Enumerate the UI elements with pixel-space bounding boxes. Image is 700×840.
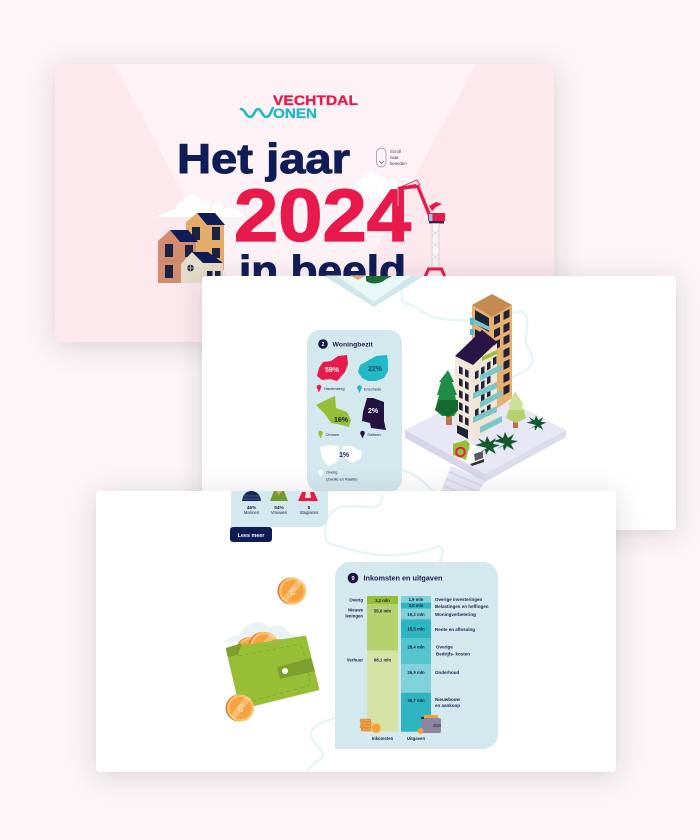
button: Lees meer — [230, 527, 272, 542]
title: Het jaar: Het jaar — [177, 135, 350, 182]
income bar — [345, 596, 398, 732]
panel: staff stats — [231, 491, 328, 527]
icon: small wallet — [418, 715, 441, 734]
expense bar: 1,9 mln — [409, 597, 424, 602]
heading: Inkomsten en uitgaven: 9 — [351, 576, 355, 582]
map: Enschede: 22% — [368, 366, 383, 373]
map: Enschede — [357, 355, 388, 393]
illustration: wallet — [224, 622, 318, 708]
orange tower — [472, 305, 512, 412]
expense bar: Overige — [436, 644, 453, 650]
expense bar: Bedrijfs- kosten — [436, 652, 470, 656]
expense bar: Onderhoud — [435, 670, 459, 675]
expense bar: 3,0 mln — [409, 603, 424, 608]
map: Overig: (Zwolle en Raalte) — [326, 476, 358, 482]
palms — [475, 436, 500, 455]
panel: Woningbezit — [307, 330, 402, 492]
income bar: 55,0 mln — [374, 608, 391, 614]
expense bar: Overige investeringen — [435, 597, 483, 602]
expense bar: Belastingen en heffingen — [435, 604, 489, 609]
cream house — [181, 252, 223, 283]
icon: women — [270, 491, 288, 501]
icon: coin stack — [360, 719, 381, 733]
icon: scroll hint: Scroll — [390, 149, 401, 154]
logo: VECHTDAL — [273, 92, 358, 108]
expense bar: 19,2 mln — [407, 612, 425, 617]
expense bar: Woningverbetering — [435, 612, 476, 617]
map: Dalfsen: 2% — [368, 408, 379, 415]
panel: staff stats: Mannen — [244, 510, 260, 515]
expense bar: 15,5 mln — [407, 626, 425, 632]
panel: Inkomsten en uitgaven: Uitgaven — [407, 736, 425, 741]
map: Enschede: Enschede — [364, 386, 381, 392]
axis labels: Inkomsten — [372, 736, 394, 741]
map: Dalfsen — [360, 398, 386, 438]
title: 2024: 2024 — [234, 174, 411, 257]
heading: Woningbezit: 2 — [322, 342, 325, 348]
panel: staff stats: 5 — [308, 505, 311, 511]
icon: coin at wallet — [226, 694, 254, 722]
income bar: leningen — [345, 614, 363, 618]
illustration: isometric building — [405, 294, 566, 493]
connector path decoration — [402, 287, 532, 500]
panel: staff stats: 46% — [247, 505, 257, 511]
panel: housing card — [202, 276, 676, 530]
balconies — [473, 364, 502, 433]
income bar: 68,1 mln — [374, 658, 391, 662]
panel: cover card — [55, 64, 554, 342]
icon: men — [242, 491, 261, 501]
map: Overig: 1% — [339, 452, 350, 459]
expense bar: 26,9 mln — [407, 670, 425, 675]
panel: staff stats: 54% — [274, 505, 285, 511]
map: Dalfsen: Dalfsen — [368, 432, 381, 437]
panel: staff stats: Vrouwen — [271, 510, 288, 515]
icon: falling coin — [278, 578, 306, 604]
icon: scroll hint — [376, 148, 407, 167]
brown house — [158, 230, 196, 283]
trees — [435, 370, 526, 428]
heading: Woningbezit — [318, 339, 374, 349]
map: Hardenberg: 59% — [325, 367, 340, 374]
panel: staff stats: Stagiaires — [300, 510, 318, 515]
van — [453, 440, 484, 466]
panel: finance card — [96, 491, 616, 772]
title: in beeld: in beeld — [239, 247, 406, 294]
cream tower — [455, 357, 473, 441]
expense bar: 36,7 mln — [407, 698, 425, 703]
income bar: Overig — [349, 598, 363, 602]
heading: Woningbezit: Woningbezit — [332, 342, 374, 348]
map: Overig: Overig — [326, 470, 337, 474]
map: Hardenberg — [317, 355, 348, 392]
icon: clouds — [155, 172, 402, 217]
icon: scroll hint: beneden — [390, 161, 407, 166]
map: Overig — [318, 445, 362, 482]
icon: houses — [158, 213, 225, 283]
platform — [405, 389, 566, 474]
funnel top — [324, 276, 424, 307]
expense bar: Nieuwbouw — [435, 697, 460, 702]
icon: crane — [398, 180, 445, 277]
heading: Inkomsten en uitgaven: Inkomsten en uitgaven — [364, 574, 442, 582]
panel: Inkomsten en uitgaven — [335, 562, 498, 749]
logo: ONEN — [273, 105, 317, 121]
map: Hardenberg: Hardenberg — [324, 386, 345, 391]
stairs — [440, 466, 485, 493]
income bar: 3,2 mln — [375, 598, 390, 603]
expense bar: en aankoop — [435, 703, 460, 708]
button: Lees meer: Lees meer — [238, 533, 265, 539]
icon: scroll hint: naar — [390, 155, 399, 160]
income bar: Nieuwe — [348, 608, 364, 612]
expense bar — [401, 596, 489, 732]
expense bar: Rente en aflossing — [435, 627, 475, 632]
logo — [241, 92, 358, 121]
income bar: Verhuur — [347, 658, 363, 662]
map: Ommen — [316, 396, 351, 438]
icon: interns — [298, 491, 318, 501]
Button stub — [379, 491, 420, 496]
map: Ommen: Ommen — [326, 432, 339, 437]
map: Ommen: 16% — [334, 417, 349, 424]
orange house — [186, 213, 224, 270]
expense bar: 28,4 mln — [407, 644, 425, 649]
